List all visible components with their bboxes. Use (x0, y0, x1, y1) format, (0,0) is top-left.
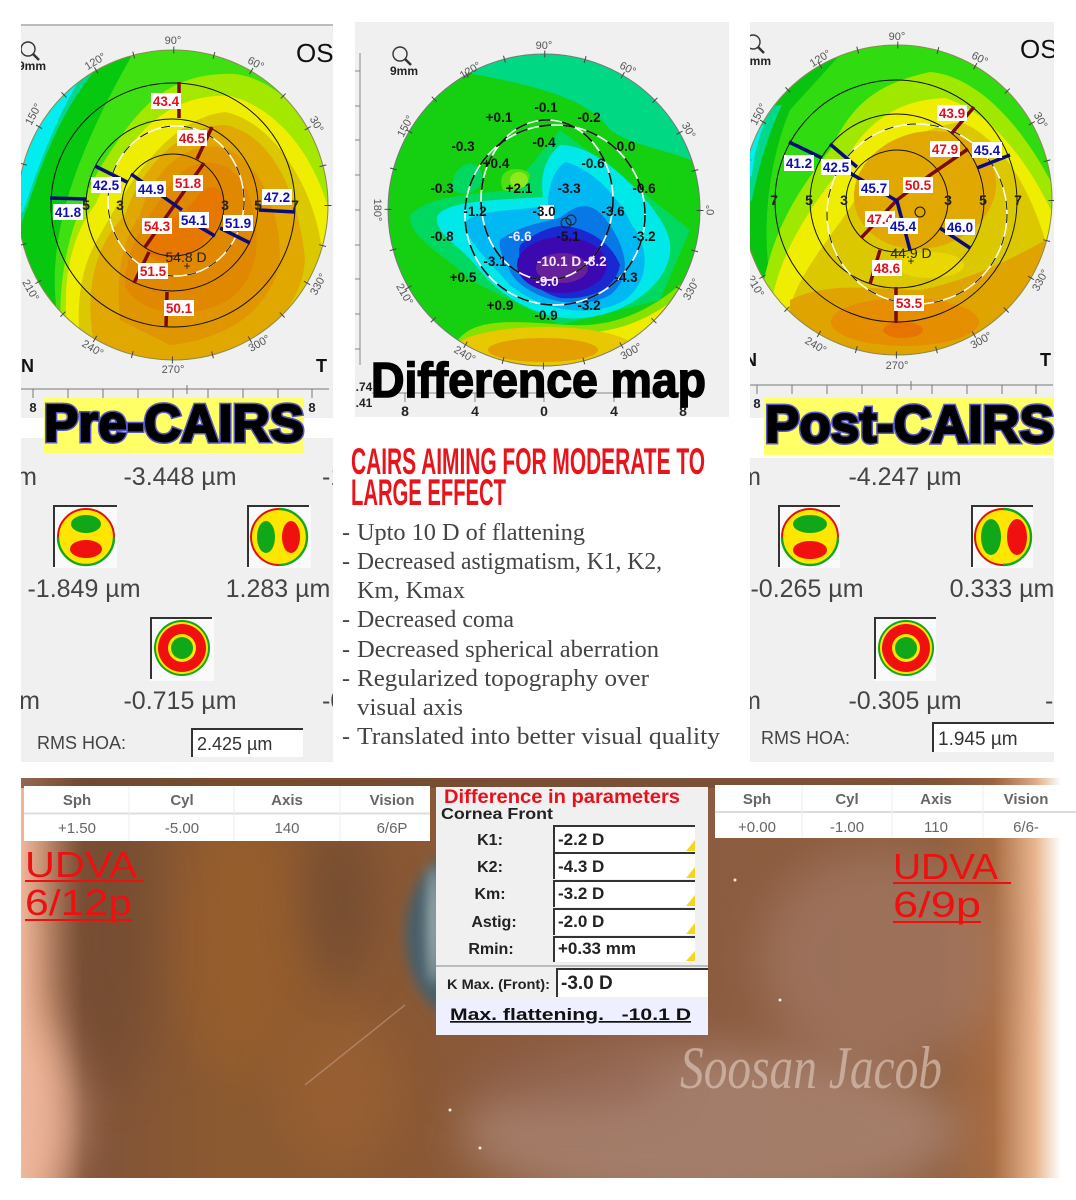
KMax row: K Max. (Front): (447, 976, 550, 992)
table: pre-CAIRS refraction: -5.00 (165, 820, 199, 837)
post-CAIRS degree scale: 90° (889, 31, 905, 43)
table: pre-CAIRS refraction: Vision (370, 792, 414, 809)
difference map dioptre values: +0.5 (450, 270, 477, 285)
label: Pre-CAIRS: Pre-CAIRS (44, 395, 304, 453)
panel: pre-CAIRS aberration readings: m (16, 463, 37, 491)
difference map degree scale: 0° (705, 205, 717, 215)
icon: difference map magnifier (393, 47, 411, 65)
difference map dioptre values: -0.3 (430, 181, 454, 196)
pre-CAIRS keratometry value labels: 46.5 (179, 131, 206, 146)
difference map dioptre values: -0.2 (577, 110, 601, 125)
Rmin row: Rmin: (468, 941, 514, 958)
pre-CAIRS keratometry value labels: 5 (82, 197, 90, 213)
UDVA pre-CAIRS (25, 844, 144, 923)
icon: post-CAIRS magnifier (746, 35, 764, 53)
panel: post-CAIRS aberration readings: m (740, 687, 761, 715)
post RMS HOA value box: 1.945 µm (938, 729, 1018, 750)
post-CAIRS keratometry value labels: 5 (805, 192, 813, 208)
difference map dioptre values: -0.4 (532, 135, 556, 150)
difference map dioptre values: -6.6 (508, 229, 532, 244)
cornea front label: Cornea Front (441, 806, 554, 823)
difference map dioptre values: -10.1 D (537, 254, 581, 269)
pre-CAIRS degree scale: 150° (23, 102, 45, 127)
difference map dioptre values: -3.2 (577, 298, 601, 313)
post-CAIRS map rim and ticks (742, 45, 1052, 355)
post-CAIRS keratometry value labels: 7 (770, 192, 778, 208)
post-CAIRS keratometry value labels: 5 (979, 192, 987, 208)
post-CAIRS keratometry value labels: 47.9 (932, 142, 958, 157)
table: post-CAIRS refraction (715, 785, 1076, 838)
text block: effects list: Decreased spherical aberration (357, 637, 659, 663)
difference map degree scale: 150° (395, 114, 417, 139)
difference map axis scale: 4 (610, 403, 618, 419)
heading: CAIRS aiming (351, 441, 705, 513)
difference map dioptre values: +0.1 (486, 110, 513, 125)
K1 row: -2.2 D (558, 830, 604, 849)
photo: slit-lamp view of the eye (0, 770, 1061, 1200)
difference map axis scale: 8 (401, 403, 409, 419)
difference map scan size: 9mm (390, 64, 418, 78)
text block: effects list: Decreased astigmatism, K1, K2, (357, 549, 662, 575)
heading: CAIRS aiming: CAIRS AIMING FOR MODERATE TO (351, 441, 705, 482)
post-CAIRS keratometry value labels: 53.5 (896, 296, 923, 311)
panel: pre-CAIRS aberration readings: -3.448 µm (123, 463, 237, 491)
difference map axis scale: .74 (356, 380, 373, 394)
pre-CAIRS degree scale: 120° (83, 51, 108, 73)
difference map degree scale: 240° (452, 344, 477, 366)
icon: post horizontal coma (971, 505, 1033, 568)
difference map dioptre values: -0.6 (581, 156, 605, 171)
K2 row: -4.3 D (558, 857, 604, 876)
Astig row: -2.0 D (558, 912, 604, 931)
difference map degree scale (371, 40, 717, 366)
post-CAIRS zone rings (775, 80, 1017, 322)
pre-CAIRS flat meridian bars (50, 166, 295, 243)
panel: post-CAIRS aberration readings: -0.265 µm (750, 575, 864, 603)
post-CAIRS colour contour map (750, 46, 1052, 354)
difference map degree scale: 120° (458, 60, 483, 82)
difference map dioptre values: +0.9 (487, 298, 513, 313)
pre-CAIRS keratometry value labels: 54.1 (181, 213, 208, 228)
pre-CAIRS degree scale: 270° (162, 364, 184, 376)
pre-CAIRS keratometry value labels: 54.8 D (165, 249, 207, 265)
pre-CAIRS keratometry value labels: 43.4 (153, 94, 180, 109)
pre RMS HOA value box: 2.425 µm (197, 734, 272, 754)
post-CAIRS degree scale: 330° (1030, 268, 1052, 293)
difference map dioptre values: -3.1 (483, 254, 507, 269)
post-CAIRS degree scale: 150° (748, 102, 770, 127)
post-CAIRS keratometry value labels: 46.0 (947, 220, 973, 235)
panel: post-CAIRS aberration readings: -0.305 µm (848, 687, 962, 715)
pre-CAIRS nasal label: N (21, 356, 34, 376)
heading: CAIRS aiming: LARGE EFFECT (351, 472, 506, 513)
Km row (474, 880, 695, 907)
post-CAIRS nasal label: N (744, 350, 757, 370)
max flattening: Max. flattening. -10.1 D (450, 1005, 691, 1024)
icon: post vertical coma (778, 505, 840, 568)
difference map rim and ticks (388, 54, 700, 366)
table: post-CAIRS refraction: 6/6- (1013, 819, 1039, 836)
difference map dioptre values: -0.1 (534, 100, 558, 115)
post-CAIRS degree scale: 30° (1031, 110, 1049, 131)
post-CAIRS degree scale: 270° (886, 360, 908, 372)
post RMS HOA value box (932, 722, 1054, 752)
text block: effects list: Decreased coma (357, 607, 514, 633)
difference map degree scale: 60° (617, 60, 638, 78)
text block: effects list: - (342, 724, 350, 750)
post-CAIRS keratometry value labels: + (907, 254, 915, 268)
label: Pre-CAIRS: Pre-CAIRS (44, 395, 304, 453)
table: pre-CAIRS refraction: Axis (271, 792, 303, 809)
text block: effects list: Regularized topography over (357, 666, 649, 692)
pre-CAIRS degree scale: 300° (247, 333, 272, 355)
K1 row (477, 825, 695, 852)
Rmin row: +0.33 mm (558, 939, 636, 958)
post-CAIRS degree scale (744, 31, 1052, 372)
difference map dioptre values: -3.3 (557, 181, 581, 196)
panel: difference in parameters (436, 787, 708, 1035)
pre-CAIRS degree scale: 60° (245, 55, 266, 73)
pre-CAIRS keratometry value labels: 54.3 (144, 219, 171, 234)
pre-CAIRS keratometry value labels: 3 (221, 197, 229, 213)
table: pre-CAIRS refraction: 6/6P (377, 820, 407, 837)
pre RMS HOA value box (191, 728, 303, 757)
pre-CAIRS scan size: 9mm (18, 59, 46, 73)
UDVA post-CAIRS: 6/9p (893, 884, 981, 925)
panel: post-CAIRS topography map (740, 22, 1060, 418)
Astig row (471, 908, 695, 935)
post-CAIRS keratometry value labels: 45.4 (890, 219, 917, 234)
post-CAIRS degree scale: 300° (969, 330, 994, 352)
text block: effects list: - (342, 666, 350, 692)
difference map axis scale: 8 (679, 403, 687, 419)
panel: post-CAIRS aberration readings: - (1045, 687, 1053, 715)
table: post-CAIRS refraction: 110 (924, 819, 948, 836)
panel: difference map (355, 22, 729, 419)
difference map dioptre values: -3.0 (532, 204, 556, 219)
text block: effects list: visual axis (357, 695, 463, 721)
table: post-CAIRS refraction: -1.00 (830, 819, 864, 836)
pre-CAIRS degree scale: 240° (80, 338, 105, 360)
icon: pre horizontal coma (247, 505, 311, 568)
difference map dashed zones (465, 120, 645, 305)
difference map degree scale: 180° (371, 199, 383, 221)
post-CAIRS keratometry value labels: 45.7 (861, 181, 887, 196)
label: Post-CAIRS: Post-CAIRS (765, 396, 1054, 454)
difference map degree scale: 210° (393, 282, 415, 307)
difference map central marker (540, 205, 554, 219)
pre-CAIRS axis scale (21, 385, 329, 415)
text block: effects list: - (342, 520, 350, 546)
post-CAIRS temporal label: T (1040, 350, 1051, 370)
pre-CAIRS eye label: OS (296, 38, 334, 68)
pre-CAIRS keratometry value labels: 44.9 (138, 182, 164, 197)
K2 row (477, 852, 695, 879)
UDVA pre-CAIRS: UDVA (25, 844, 137, 885)
panel: pre-CAIRS aberration readings: 1.283 µm (226, 575, 330, 603)
table: post-CAIRS refraction: Axis (920, 791, 952, 808)
panel: pre-CAIRS aberration readings: -0 (322, 687, 344, 715)
difference map vertical scale (355, 53, 360, 365)
difference map dioptre values: -0.3 (451, 139, 475, 154)
pre-CAIRS colour contour map (21, 50, 328, 360)
post-CAIRS degree scale: 210° (744, 274, 766, 299)
post-CAIRS keratometry value labels: 50.5 (905, 178, 932, 193)
post-CAIRS degree scale: 60° (969, 50, 990, 68)
Km row: Km: (474, 886, 506, 903)
post RMS HOA label: RMS HOA: (761, 728, 850, 748)
post-CAIRS axis scale (750, 381, 1053, 394)
post-CAIRS flat meridian bars (789, 142, 1010, 250)
UDVA post-CAIRS (893, 846, 1011, 925)
KMax row (436, 966, 708, 997)
pre-CAIRS keratometry value labels (53, 93, 299, 316)
post-CAIRS keratometry value labels: 3 (840, 192, 848, 208)
pre-CAIRS keratometry value labels: 7 (291, 197, 299, 213)
pre-CAIRS degree scale: 210° (19, 278, 41, 303)
difference map dioptre values: -9.0 (535, 274, 559, 289)
table: post-CAIRS refraction: Sph (743, 791, 771, 808)
post-CAIRS keratometry value labels: 42.5 (823, 160, 850, 175)
pre-CAIRS degree scale: 330° (308, 272, 330, 297)
difference map degree scale: 90° (536, 40, 552, 52)
panel: post-CAIRS aberration readings: -4.247 µm (848, 463, 962, 491)
difference map degree scale: 300° (619, 341, 644, 363)
icon: pre spherical aberration (150, 617, 214, 681)
difference map dioptre values: -3.6 (601, 204, 625, 219)
text block: effects list: Translated into better visual quality (357, 724, 720, 750)
K1 row: K1: (477, 832, 503, 849)
pre-CAIRS keratometry value labels: 42.5 (93, 178, 120, 193)
post-CAIRS scan size: 9mm (743, 54, 771, 68)
table: post-CAIRS refraction: Vision (1004, 791, 1048, 808)
UDVA post-CAIRS: UDVA (893, 846, 998, 887)
difference map degree scale: 330° (681, 277, 703, 302)
text block: effects list (342, 520, 720, 750)
icon: post spherical aberration (874, 617, 936, 681)
label: Post-CAIRS: Post-CAIRS (765, 396, 1054, 454)
pre-CAIRS steep meridian bars (134, 82, 212, 327)
text block: effects list: - (342, 637, 350, 663)
table: post-CAIRS refraction: +0.00 (738, 819, 776, 836)
post-CAIRS eye label: OS (1020, 34, 1058, 64)
pre-CAIRS axis scale: 8 (308, 400, 316, 415)
difference map dioptre values: 0.0 (617, 139, 635, 154)
difference map colour contours (388, 54, 700, 366)
K2 row: K2: (477, 859, 503, 876)
text block: effects list: - (342, 607, 350, 633)
post-CAIRS keratometry value labels: 41.2 (786, 156, 812, 171)
post-CAIRS keratometry value labels: 43.9 (939, 106, 965, 121)
difference map dioptre values: -3.2 (632, 229, 656, 244)
post-CAIRS keratometry value labels: 47.4 (867, 212, 894, 227)
difference map dioptre values (430, 100, 656, 323)
post-CAIRS degree scale: 240° (803, 335, 828, 357)
difference map dioptre values: +0.4 (483, 156, 510, 171)
post-CAIRS keratometry value labels: 45.4 (974, 143, 1001, 158)
pre-CAIRS keratometry value labels: 3 (116, 197, 124, 213)
table: pre-CAIRS refraction (24, 786, 430, 841)
pre-CAIRS keratometry value labels: 41.8 (55, 205, 82, 220)
pre-CAIRS degree scale (19, 35, 330, 376)
difference map dioptre values: +2.1 (506, 181, 533, 196)
pre-CAIRS keratometry value labels: 5 (254, 197, 262, 213)
post-CAIRS keratometry value labels: 7 (1014, 192, 1022, 208)
icon: pre vertical coma (53, 505, 117, 568)
Km row: -3.2 D (558, 884, 604, 903)
pre-CAIRS map rim and ticks (18, 50, 328, 360)
Astig row: Astig: (471, 914, 517, 931)
difference map dioptre values: -1.2 (463, 204, 487, 219)
post-CAIRS degree scale: 120° (808, 48, 833, 70)
difference map axis scale: 4 (471, 403, 479, 419)
pre-CAIRS zone rings (51, 83, 295, 327)
difference map dioptre values: -5.1 (556, 229, 580, 244)
panel: pre-CAIRS topography map (0, 24, 345, 418)
pre-CAIRS keratometry value labels: 51.5 (140, 264, 167, 279)
post-CAIRS axis number: 8 (753, 396, 761, 411)
difference map dioptre values: -0.8 (430, 229, 454, 244)
panel: post-CAIRS aberration readings: m (740, 463, 761, 491)
panel: pre-CAIRS aberration readings (16, 438, 344, 762)
post-CAIRS keratometry value labels: 48.6 (874, 261, 901, 276)
panel: post-CAIRS aberration readings (740, 458, 1054, 762)
post-CAIRS keratometry value labels: 44.9 D (890, 245, 932, 261)
table: pre-CAIRS refraction: Sph (63, 792, 91, 809)
label: Difference map: Difference map (371, 354, 706, 408)
KMax row: -3.0 D (561, 973, 613, 994)
pre RMS HOA label: RMS HOA: (37, 733, 126, 753)
watermark signature: Soosan Jacob (680, 1035, 942, 1101)
pre-CAIRS keratometry value labels: 51.8 (175, 176, 202, 191)
parameters heading: Difference in parameters (444, 787, 680, 808)
post-CAIRS keratometry value labels: 3 (944, 192, 952, 208)
pre-CAIRS degree scale: 30° (307, 114, 325, 135)
panel: pre-CAIRS aberration readings: -1 (322, 463, 344, 491)
text block: effects list: Upto 10 D of flattening (357, 520, 585, 546)
panel: pre-CAIRS aberration readings: -0.715 µm (123, 687, 237, 715)
table: pre-CAIRS refraction: 140 (274, 820, 300, 837)
difference map dioptre values: -4.3 (614, 270, 638, 285)
Rmin row (468, 936, 695, 962)
post-CAIRS keratometry value labels (770, 105, 1022, 311)
pre-CAIRS axis scale: 8 (29, 400, 37, 415)
difference map axis scale: 0 (540, 403, 548, 419)
pre-CAIRS keratometry value labels: 47.2 (264, 190, 290, 205)
post-CAIRS steep meridian bars (861, 107, 974, 323)
table: post-CAIRS refraction: Cyl (835, 791, 859, 808)
difference map dioptre values: -8.2 (583, 254, 607, 269)
text block: effects list: - (342, 549, 350, 575)
pre-CAIRS magnifier icon (21, 42, 39, 60)
pre-CAIRS degree scale: 90° (165, 35, 181, 47)
difference map degree scale: 30° (679, 120, 697, 141)
difference map axis scale: .41 (356, 396, 373, 410)
pre-CAIRS keratometry value labels: + (183, 259, 191, 273)
text block: effects list: Km, Kmax (357, 578, 465, 604)
table: pre-CAIRS refraction: Cyl (170, 792, 194, 809)
pre-CAIRS keratometry value labels: 50.1 (166, 301, 193, 316)
table: pre-CAIRS refraction: +1.50 (58, 820, 96, 837)
difference map axis scale (356, 380, 700, 419)
panel: pre-CAIRS aberration readings: m (19, 687, 40, 715)
difference map dioptre values: -0.6 (632, 181, 656, 196)
panel: post-CAIRS aberration readings: 0.333 µm (950, 575, 1054, 603)
difference map dioptre values: -0.9 (534, 308, 558, 323)
pre-CAIRS temporal label: T (316, 356, 327, 376)
panel: pre-CAIRS aberration readings: -1.849 µm (27, 575, 141, 603)
pre-CAIRS keratometry value labels: 51.9 (225, 216, 251, 231)
UDVA pre-CAIRS: 6/12p (25, 882, 132, 923)
